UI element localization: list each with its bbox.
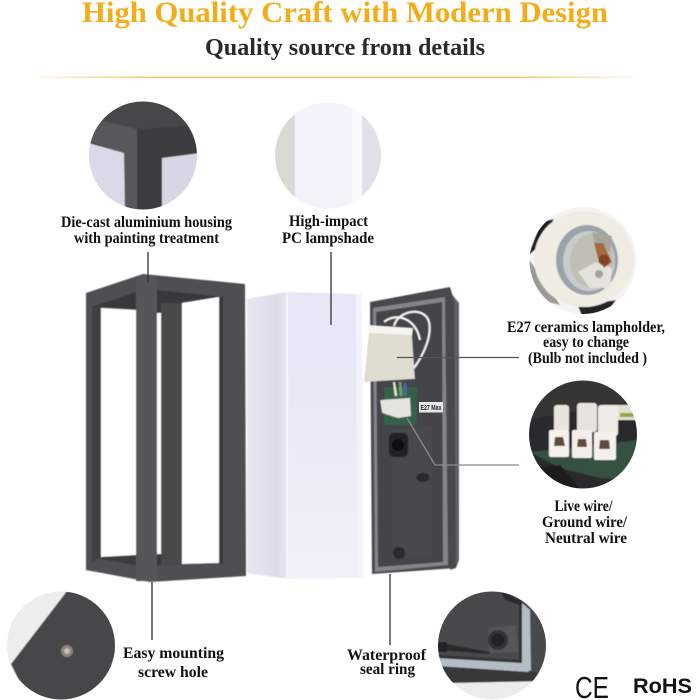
terminal N <box>594 405 618 460</box>
housing label: Die-cast aluminium housing <box>61 214 232 231</box>
detail circle: lampshade <box>275 102 381 208</box>
label: E27 Max: E27 Max <box>420 405 442 412</box>
socket and screw holes <box>389 433 430 559</box>
ceramic lampholder <box>364 312 430 382</box>
leader line: lampshade <box>330 252 332 325</box>
housing label: with painting treatment <box>74 230 220 247</box>
lampshade <box>247 292 363 579</box>
lampholder label <box>507 319 665 367</box>
lampshade label: High-impact <box>289 213 369 230</box>
screw hole label <box>123 645 224 681</box>
seal ring label: Waterproof <box>347 647 427 664</box>
screw hole label: Easy mounting <box>123 645 224 662</box>
detail circle: terminal block <box>529 380 637 488</box>
wire label: Live wire/ <box>554 498 613 515</box>
detail circle: housing corner <box>89 102 197 210</box>
subtitle: Quality source from details <box>205 35 485 61</box>
detail circle: seal ring <box>438 592 546 700</box>
leader line: seal ring <box>389 574 391 645</box>
terminal E <box>572 403 597 458</box>
lampholder label: E27 ceramics lampholder, <box>507 319 665 336</box>
wire label: Ground wire/ <box>542 514 628 531</box>
leader line: lampholder <box>397 356 519 358</box>
terminal L <box>549 405 569 457</box>
RoHS mark: RoHS <box>633 675 692 698</box>
leader line: screw hole <box>151 582 153 640</box>
wire label <box>542 498 628 547</box>
wire label: Neutral wire <box>545 530 627 547</box>
lampholder label: easy to change <box>543 334 629 351</box>
detail circle: screw hole <box>7 592 115 700</box>
seal ring label: seal ring <box>360 661 415 678</box>
plate body <box>370 287 459 574</box>
lampholder label: (Bulb not included ) <box>528 350 647 367</box>
detail circle: E27 lampholder <box>530 207 636 314</box>
PCB with terminal block <box>380 382 417 425</box>
leader line: housing <box>147 252 149 283</box>
back plate with internals <box>364 287 459 574</box>
leader line: wiring <box>407 418 519 465</box>
screw hole label: screw hole <box>138 664 208 681</box>
seal ring label <box>347 647 427 678</box>
label: E27 Max <box>419 402 443 412</box>
lampshade label: PC lampshade <box>282 230 374 247</box>
lampshade label <box>282 213 374 247</box>
lamp housing frame <box>86 274 246 582</box>
housing label <box>61 214 232 247</box>
